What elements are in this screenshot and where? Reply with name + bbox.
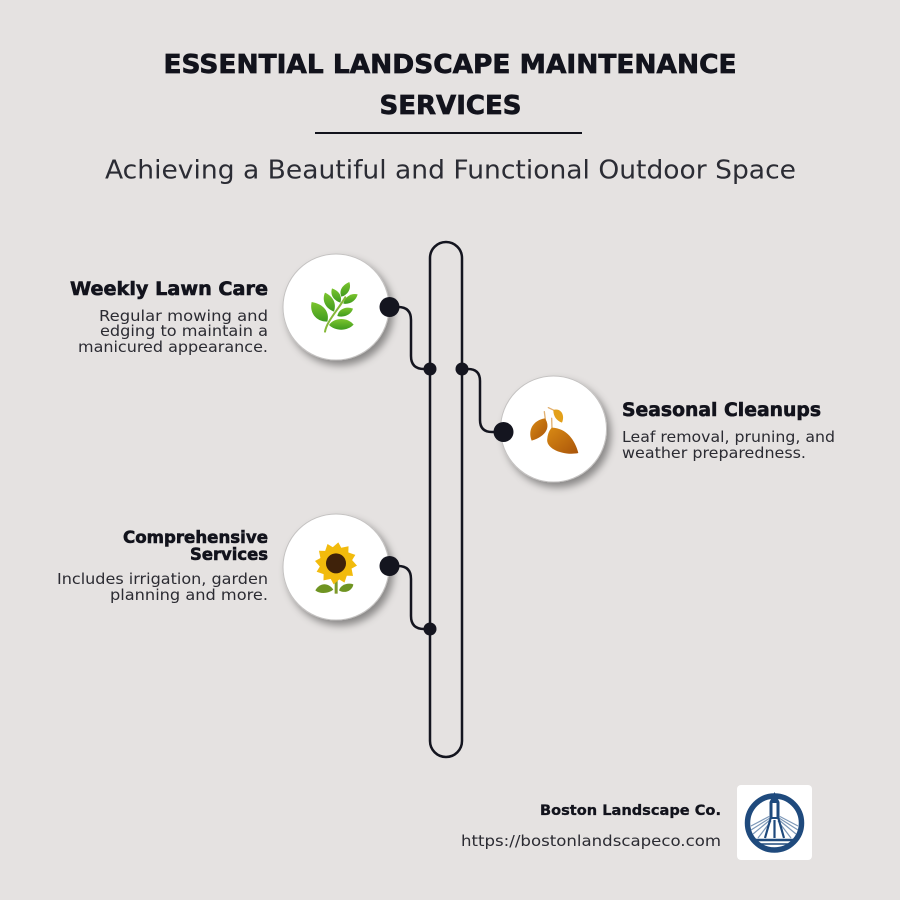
node: pill dot (424, 362, 436, 376)
icon: autumn leaves (530, 408, 578, 454)
node: pill dot (456, 362, 468, 376)
connector: weekly lawn care (389, 307, 430, 369)
timeline pill (430, 242, 462, 757)
heading: comprehensive services (123, 528, 268, 565)
title: ESSENTIAL LANDSCAPE MAINTENANCE (164, 50, 736, 80)
heading: comprehensive services: Services (190, 545, 268, 565)
text: weekly lawn care description: edging to maintain a (100, 322, 268, 340)
node: icon dot (380, 556, 400, 576)
text: seasonal cleanups description (622, 428, 835, 462)
node: pill dot (424, 622, 436, 636)
node: icon dot (380, 297, 400, 317)
text: weekly lawn care description (78, 307, 268, 356)
panel: comprehensive services (57, 514, 436, 636)
icon: herb (311, 282, 358, 332)
icon circle: sunflower (283, 514, 389, 620)
title (164, 50, 736, 121)
heading: weekly lawn care: Weekly Lawn Care (70, 278, 268, 300)
logo: Boston Landscape Co. bridge (737, 785, 812, 860)
text: comprehensive services description: Includes irrigation, garden (57, 570, 268, 588)
text: weekly lawn care description: manicured appearance. (78, 338, 268, 356)
text: seasonal cleanups description: Leaf removal, pruning, and (622, 428, 835, 446)
panel: weekly lawn care (70, 254, 436, 376)
icon circle: autumn leaves (500, 376, 606, 482)
panel: seasonal cleanups (456, 362, 835, 482)
connector: comprehensive services (389, 566, 430, 629)
node: icon dot (494, 422, 514, 442)
footer: website url: https://bostonlandscapeco.com (461, 832, 721, 850)
icon: sunflower (314, 542, 358, 594)
text: comprehensive services description: planning and more. (110, 586, 268, 604)
text: seasonal cleanups description: weather preparedness. (622, 444, 806, 462)
footer: company name: Boston Landscape Co. (540, 803, 721, 819)
title underline (315, 132, 582, 134)
connector: seasonal cleanups (462, 369, 503, 432)
heading: comprehensive services: Comprehensive (123, 528, 268, 548)
subtitle: Achieving a Beautiful and Functional Outdoor Space (105, 156, 796, 186)
text: weekly lawn care description: Regular mowing and (99, 307, 268, 325)
title: SERVICES (380, 91, 522, 121)
heading: seasonal cleanups: Seasonal Cleanups (622, 399, 821, 421)
icon circle: herb (283, 254, 389, 360)
text: comprehensive services description (57, 570, 268, 604)
